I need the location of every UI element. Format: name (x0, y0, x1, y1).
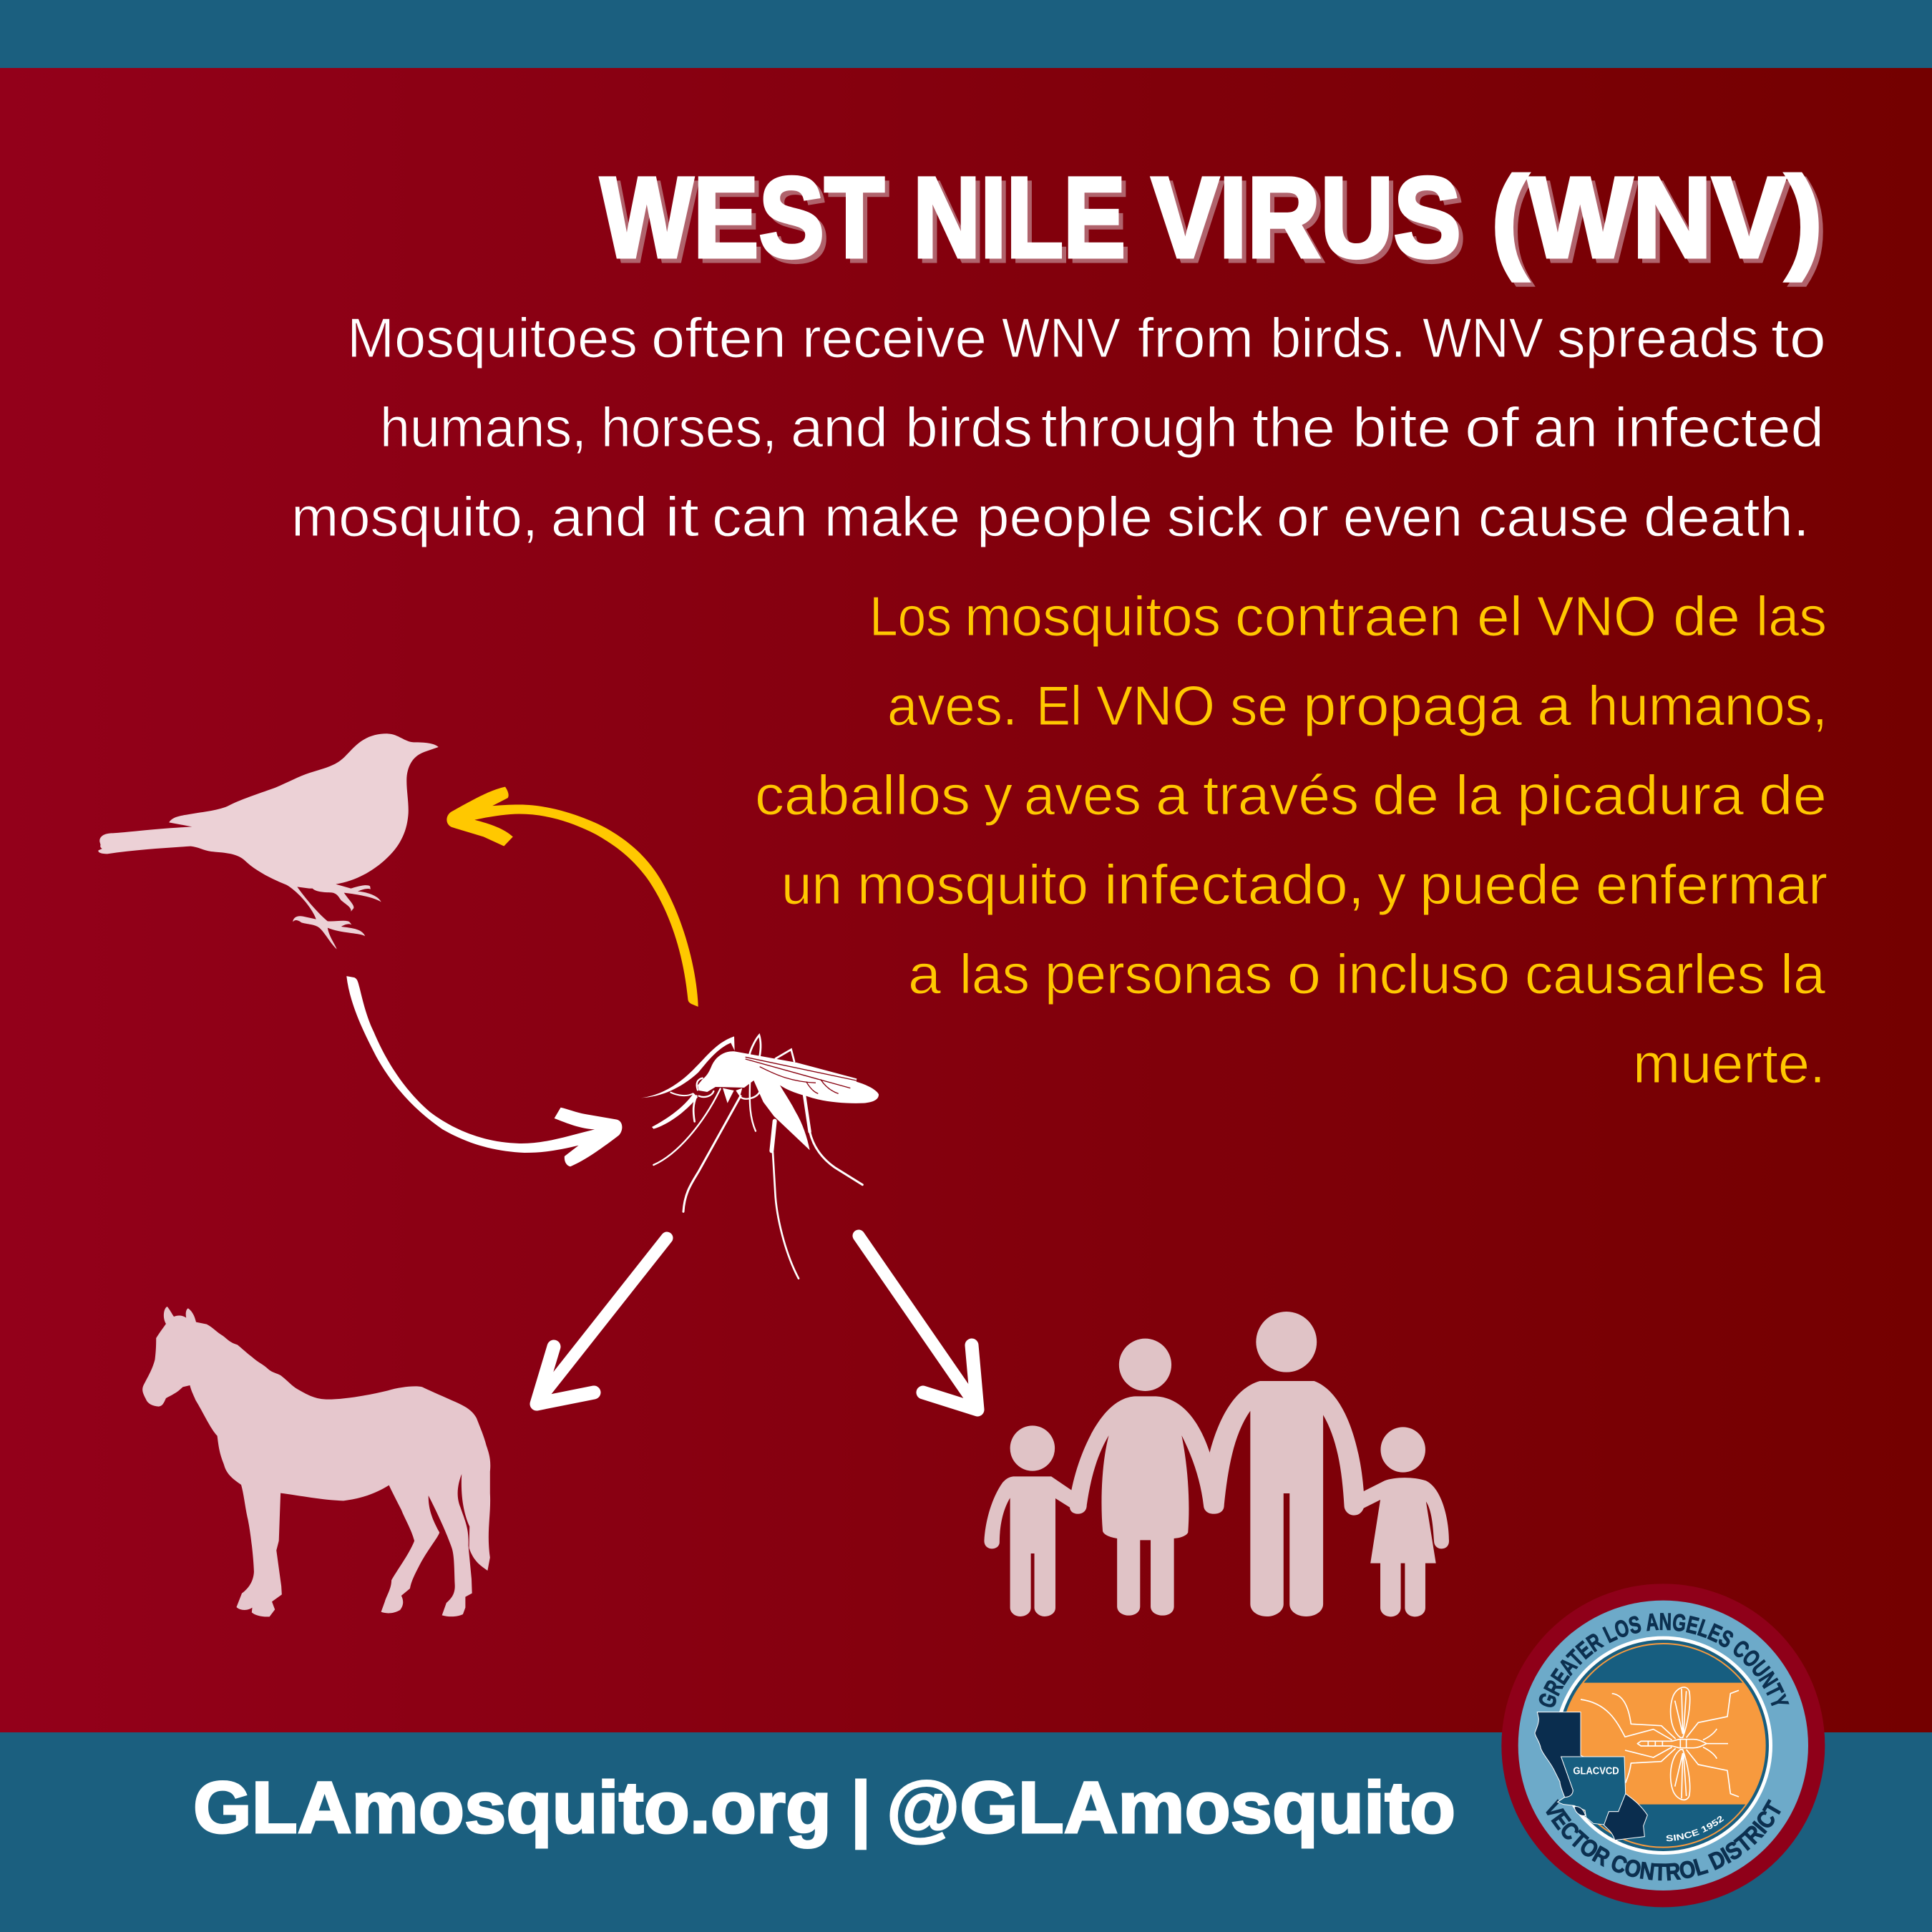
logo California map (1535, 1712, 1584, 1797)
Spanish paragraph: se (1230, 674, 1288, 737)
Spanish paragraph: las (960, 942, 1030, 1005)
Spanish paragraph: infectado, (1104, 853, 1365, 916)
title: NILE (913, 153, 1126, 281)
English paragraph: cause (1478, 485, 1629, 548)
English paragraph: receive (802, 306, 987, 369)
English paragraph: to (1771, 306, 1826, 369)
arrow: mosquito to family (859, 1236, 977, 1410)
Spanish paragraph (755, 585, 1828, 1095)
title: NILE (917, 157, 1130, 286)
English paragraph: spreads (1557, 306, 1759, 369)
icon: mosquito (641, 1035, 879, 1279)
English paragraph: make (824, 485, 960, 548)
Spanish paragraph: aves (1024, 763, 1141, 826)
English paragraph: sick (1167, 485, 1264, 548)
arrow: mosquito to horse (537, 1238, 667, 1404)
Spanish paragraph: la (1780, 942, 1826, 1005)
Spanish paragraph: través (1203, 763, 1359, 826)
English paragraph: can (712, 485, 808, 548)
Spanish paragraph: causarles (1525, 942, 1765, 1005)
Spanish paragraph: personas (1045, 942, 1272, 1005)
arrow: bird to mosquito (white) (346, 976, 622, 1166)
English paragraph: infected (1614, 396, 1824, 459)
logo bottom ring text: VECTOR CONTROL DISTRICT (1546, 1799, 1781, 1880)
Spanish paragraph: o (1287, 942, 1321, 1005)
English paragraph: people (977, 485, 1153, 548)
English paragraph: WNV (1002, 306, 1121, 369)
Spanish paragraph: puede (1420, 853, 1581, 916)
Spanish paragraph: enfermar (1596, 853, 1828, 916)
English paragraph: and (551, 485, 648, 548)
English paragraph: WNV (1423, 306, 1543, 369)
Spanish paragraph: un (781, 853, 842, 916)
logo GLACVCD label: GLACVCD (1573, 1765, 1619, 1777)
icon: horse (142, 1307, 490, 1616)
English paragraph: and (791, 396, 888, 459)
Spanish paragraph: humanos, (1588, 674, 1828, 737)
Spanish paragraph: Los (869, 585, 952, 648)
English paragraph: of (1465, 396, 1519, 459)
English paragraph: bite (1352, 396, 1451, 459)
title: (WNV) (1491, 153, 1823, 281)
Spanish paragraph: aves. (887, 674, 1018, 737)
logo Los Angeles County shape (1558, 1757, 1626, 1825)
icon: family of four (984, 1312, 1449, 1616)
English paragraph: even (1343, 485, 1463, 548)
English paragraph (291, 306, 1826, 548)
logo Orange County shape (1604, 1794, 1647, 1840)
Spanish paragraph: mosquito (857, 853, 1088, 916)
English paragraph: birds. (1270, 306, 1406, 369)
Spanish paragraph: de (1372, 763, 1439, 826)
English paragraph: mosquito, (291, 485, 538, 548)
English paragraph: birds (905, 396, 1033, 459)
title: (WNV) (1496, 157, 1827, 286)
logo small blob (1574, 1807, 1586, 1815)
Spanish paragraph: y (1377, 853, 1406, 916)
Spanish paragraph: a (1156, 763, 1189, 826)
title: WEST (605, 157, 889, 286)
English paragraph: it (665, 485, 699, 548)
title (600, 153, 1827, 286)
logo top ring text: GREATER LOS ANGELES COUNTY (1538, 1613, 1789, 1707)
Spanish paragraph: incluso (1336, 942, 1510, 1005)
English paragraph: Mosquitoes (347, 306, 638, 369)
English paragraph: humans, (380, 396, 587, 459)
logo: GLACVCD seal (1501, 1584, 1825, 1908)
Spanish paragraph: picadura (1517, 763, 1745, 826)
bottom blue footer band (0, 1732, 1932, 1932)
logo since 1952: SINCE 1952 (1666, 1816, 1724, 1842)
footer website and handle: GLAmosquito.org (193, 1767, 831, 1848)
Spanish paragraph: las (1756, 585, 1827, 648)
Spanish paragraph: VNO (1537, 585, 1657, 648)
Spanish paragraph: caballos (755, 763, 970, 826)
Spanish paragraph: propaga (1303, 674, 1523, 737)
title: WEST (600, 153, 884, 281)
Spanish paragraph: mosquitos (965, 585, 1221, 648)
English paragraph: through (1041, 396, 1238, 459)
Spanish paragraph: VNO (1096, 674, 1215, 737)
Spanish paragraph: de (1759, 763, 1827, 826)
English paragraph: from (1138, 306, 1254, 369)
Spanish paragraph: el (1477, 585, 1523, 648)
English paragraph: death. (1644, 485, 1810, 548)
Spanish paragraph: y (984, 763, 1013, 826)
English paragraph: horses, (601, 396, 777, 459)
Spanish paragraph: muerte. (1633, 1032, 1825, 1095)
title: VIRUS (1151, 153, 1461, 281)
footer website and handle (193, 1767, 1455, 1849)
footer website and handle: | (851, 1767, 871, 1849)
Spanish paragraph: contraen (1235, 585, 1461, 648)
arrow: mosquito to bird (yellow) (447, 787, 698, 1007)
logo mosquito line drawing (1581, 1687, 1739, 1800)
English paragraph: the (1252, 396, 1335, 459)
Spanish paragraph: a (1537, 674, 1572, 737)
English paragraph: an (1533, 396, 1598, 459)
icon: bird (98, 733, 439, 950)
Spanish paragraph: de (1673, 585, 1740, 648)
English paragraph: or (1277, 485, 1329, 548)
Spanish paragraph: a (908, 942, 942, 1005)
Spanish paragraph: la (1455, 763, 1502, 826)
Spanish paragraph: El (1036, 674, 1082, 737)
footer website and handle: @GLAmosquito (887, 1767, 1455, 1848)
English paragraph: often (651, 306, 786, 369)
title: VIRUS (1156, 157, 1465, 286)
top blue bar (0, 0, 1932, 68)
